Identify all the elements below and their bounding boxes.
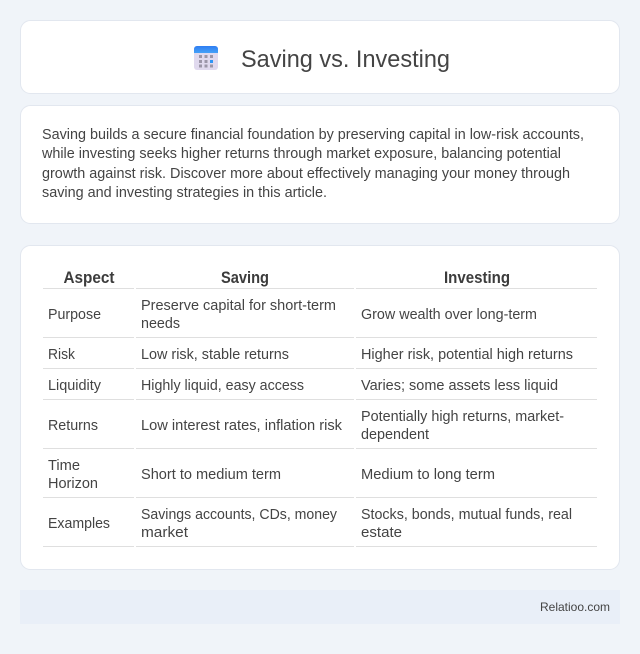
footer text: Relatioo.com: [540, 600, 610, 614]
text block: introduction: [41, 127, 584, 201]
row: time horizon: Time: [48, 458, 80, 474]
text block: introduction: saving and investing strategies in this article.: [42, 185, 327, 201]
row: purpose: [48, 298, 537, 332]
text block: introduction: growth against risk. Discover more about effectively managing your money through: [42, 166, 570, 182]
row: examples: market: [141, 525, 188, 541]
row: examples: Examples: [48, 516, 110, 532]
footer bar: [20, 590, 620, 624]
row: risk: Risk: [48, 347, 76, 363]
row: risk: Low risk, stable returns: [141, 347, 289, 363]
row: liquidity: Highly liquid, easy access: [141, 378, 304, 394]
row: liquidity: Liquidity: [48, 378, 102, 394]
row: returns: Potentially high returns, market-: [361, 409, 564, 425]
row: liquidity: Varies; some assets less liquid: [361, 378, 558, 394]
row: purpose: Purpose: [48, 307, 101, 323]
row: time horizon: Short to medium term: [141, 467, 281, 483]
row: liquidity: [48, 378, 558, 394]
panel: introduction: [20, 106, 620, 224]
row: purpose: needs: [141, 316, 180, 332]
row: examples: Stocks, bonds, mutual funds, real: [361, 507, 572, 523]
row: returns: Returns: [48, 418, 98, 434]
row: returns: Low interest rates, inflation risk: [141, 418, 343, 434]
panel: header: [20, 20, 620, 94]
row: examples: [48, 507, 572, 541]
panel: comparison table: [20, 246, 620, 570]
row: time horizon: [48, 458, 495, 492]
table header row: [64, 269, 510, 287]
row: time horizon: Medium to long term: [361, 467, 495, 483]
table header row: Aspect: [64, 269, 115, 287]
title: Saving vs. Investing: [241, 46, 450, 73]
table header row: Investing: [444, 269, 510, 287]
row: examples: Savings accounts, CDs, money: [141, 507, 338, 523]
row: risk: [48, 347, 573, 363]
row: returns: dependent: [361, 427, 429, 443]
text block: introduction: Saving builds a secure financial foundation by preserving capital in low-risk accounts,: [42, 127, 584, 143]
row: purpose: Grow wealth over long-term: [361, 307, 537, 323]
table header row: Saving: [221, 269, 269, 287]
row: risk: Higher risk, potential high returns: [361, 347, 573, 363]
row: purpose: Preserve capital for short-term: [141, 298, 336, 314]
row: time horizon: Horizon: [48, 476, 98, 492]
icon: calendar: [194, 46, 218, 70]
text block: introduction: while investing seeks higher returns through market exposure, balancing potential: [41, 146, 561, 162]
row: examples: estate: [361, 525, 402, 541]
row: returns: [48, 409, 564, 443]
